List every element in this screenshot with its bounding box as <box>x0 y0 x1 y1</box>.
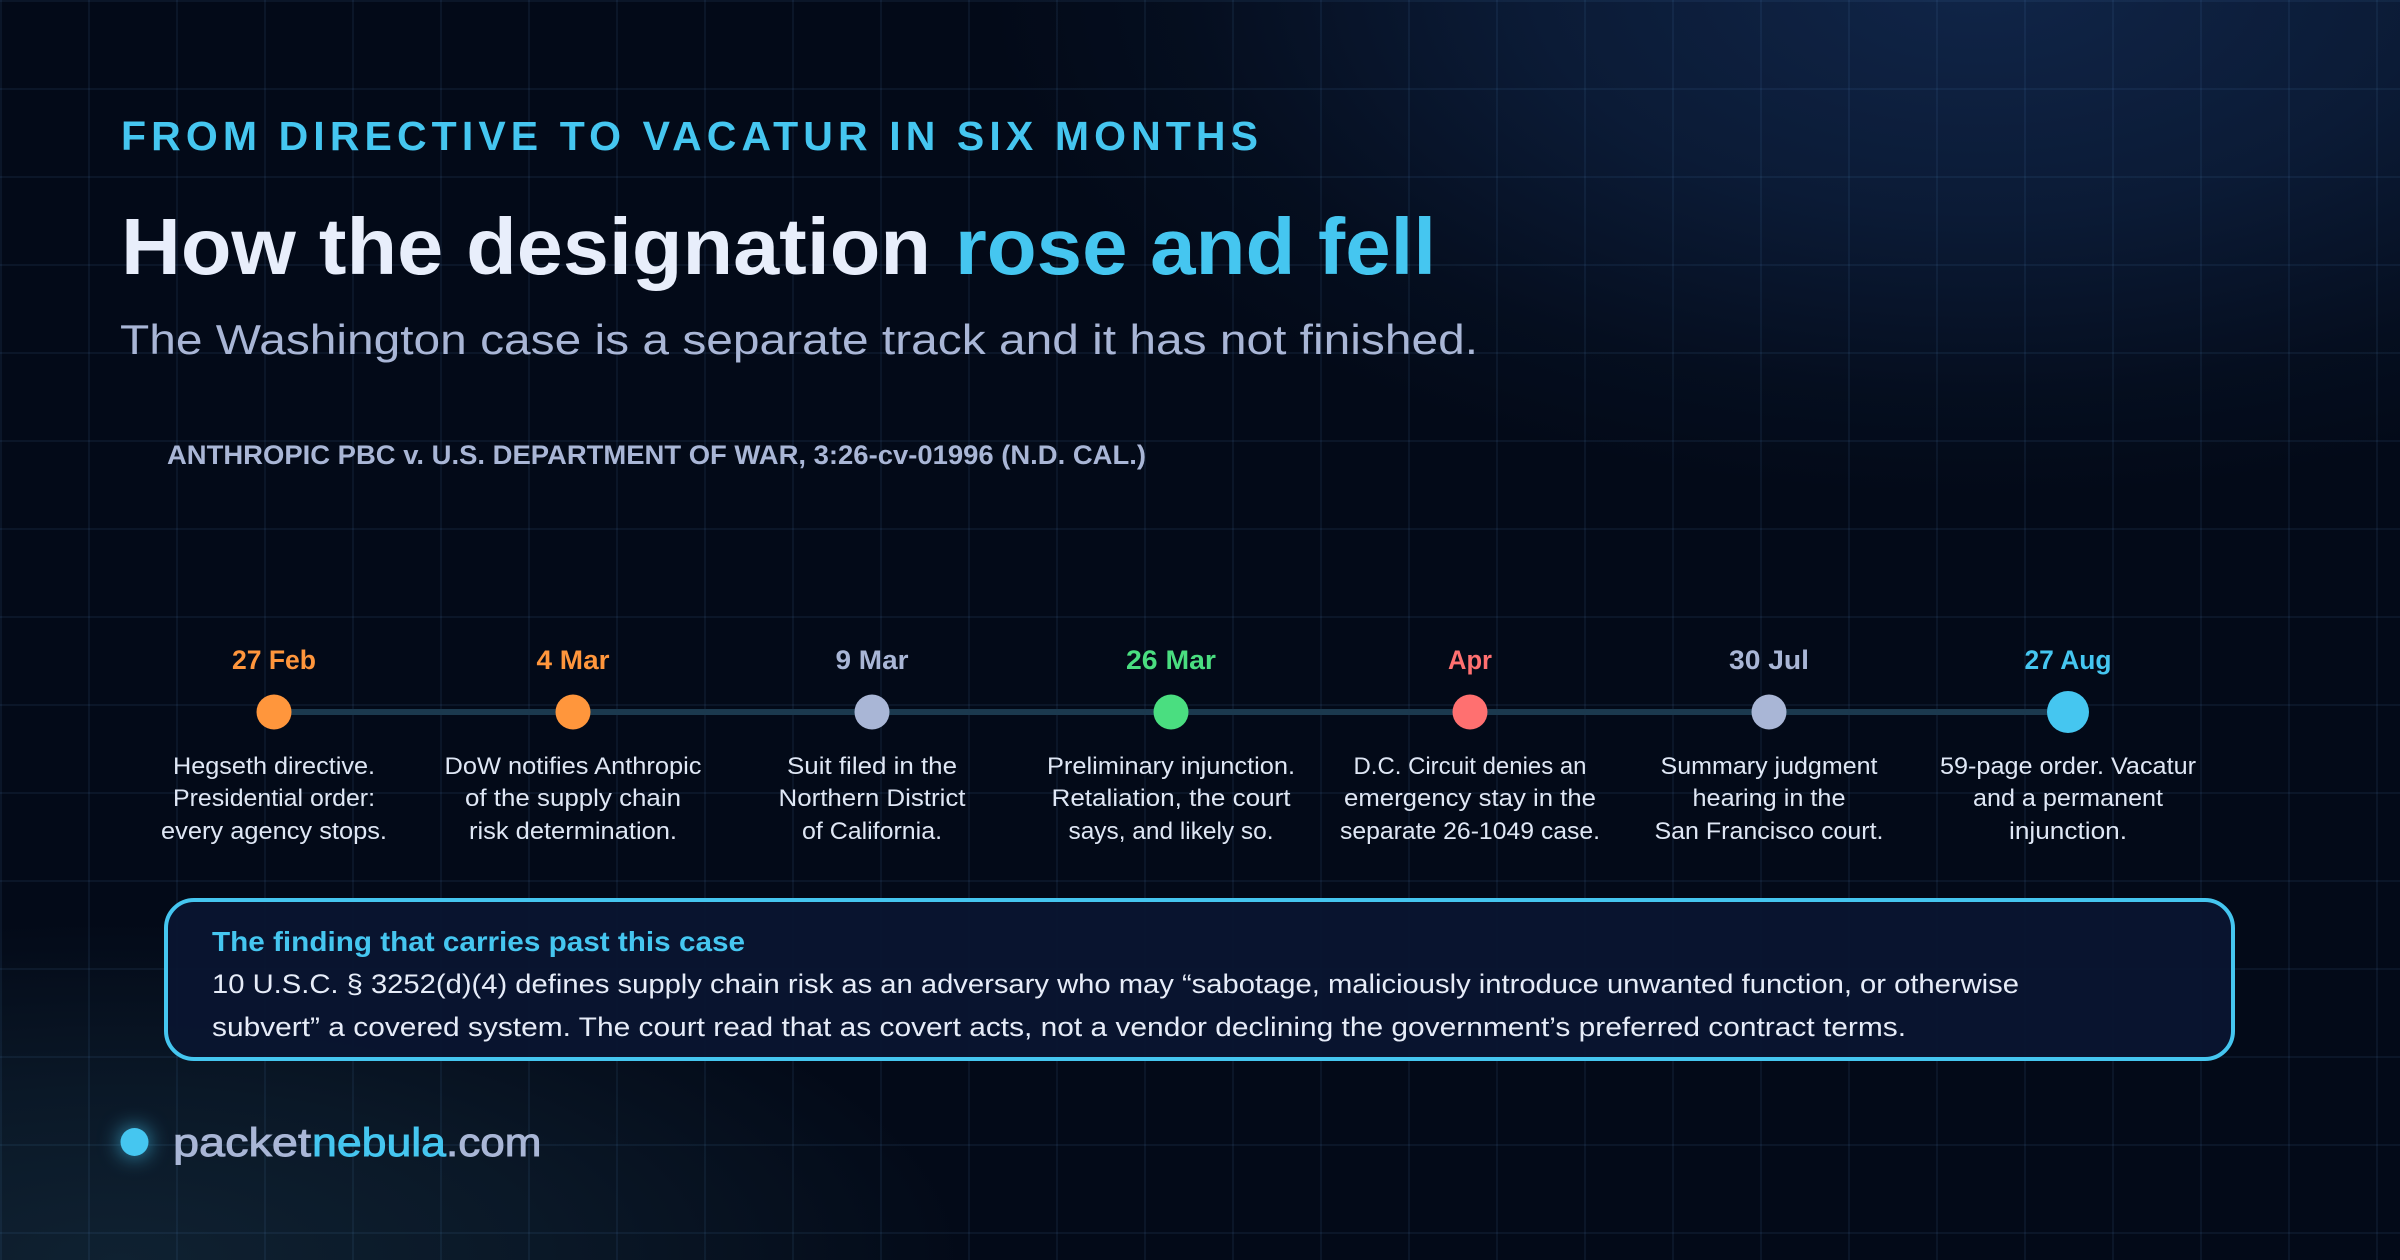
event: 4 Mar: DoW notifies Anthropic <box>444 753 702 780</box>
event: 26 Mar: says, and likely so. <box>1068 818 1274 845</box>
event: 4 Mar: risk determination. <box>469 818 677 845</box>
case label: ANTHROPIC PBC v. U.S. DEPARTMENT OF WAR, 3:26-cv-01996 (N.D. CAL.) <box>167 440 1146 470</box>
title: How the designation <box>121 202 931 291</box>
icon: glowing dot <box>120 1128 148 1156</box>
brand text: packet <box>173 1121 311 1165</box>
callout body: 10 U.S.C. § 3252(d)(4) defines supply chain risk as an adversary who may “sabotage, maliciously introduce unwanted function, or otherwise <box>212 969 2019 999</box>
event: 27 Aug: injunction. <box>2009 818 2127 845</box>
eyebrow: FROM DIRECTIVE TO VACATUR IN SIX MONTHS <box>121 113 1258 159</box>
event: 30 Jul: hearing in the <box>1692 785 1846 812</box>
callout body <box>212 969 2019 1042</box>
event: 30 Jul: Summary judgment <box>1660 753 1878 780</box>
event: Apr: emergency stay in the <box>1344 785 1596 812</box>
event: 4 Mar: 4 Mar <box>536 645 610 675</box>
event: 4 Mar <box>444 645 702 845</box>
title: rose and fell <box>955 202 1436 291</box>
event: 27 Aug: and a permanent <box>1973 785 2163 812</box>
event: 4 Mar: of the supply chain <box>465 785 681 812</box>
event: 27 Feb: every agency stops. <box>161 818 387 845</box>
event: 9 Mar: Northern District <box>778 785 966 812</box>
event: 27 Aug: 27 Aug <box>2024 645 2112 675</box>
callout body: subvert” a covered system. The court read that as covert acts, not a vendor declining the government’s preferred contract terms. <box>212 1012 1906 1042</box>
timeline <box>161 645 2196 845</box>
brand text <box>173 1121 542 1165</box>
event: Apr: D.C. Circuit denies an <box>1354 753 1586 780</box>
event: 26 Mar: 26 Mar <box>1126 645 1217 675</box>
event: 27 Aug <box>1940 645 2196 845</box>
event: 30 Jul <box>1654 645 1884 845</box>
event: 9 Mar <box>778 645 966 845</box>
event: 26 Mar <box>1047 645 1295 845</box>
event: 9 Mar: of California. <box>802 818 942 845</box>
event: 9 Mar: Suit filed in the <box>787 753 957 780</box>
brand text: nebula <box>312 1121 447 1165</box>
event: Apr: separate 26-1049 case. <box>1340 818 1600 845</box>
timeline axis <box>274 709 2068 715</box>
footer brand <box>120 1121 542 1165</box>
callout <box>166 900 2233 1059</box>
event: 27 Feb: 27 Feb <box>232 645 316 675</box>
event: 27 Feb: Presidential order: <box>173 785 375 812</box>
event: 27 Feb <box>161 645 387 845</box>
event: 27 Feb: Hegseth directive. <box>173 753 375 780</box>
title <box>121 202 1436 291</box>
event: Apr <box>1340 645 1600 845</box>
event: 9 Mar: 9 Mar <box>836 645 909 675</box>
event: 26 Mar: Preliminary injunction. <box>1047 753 1295 780</box>
event: 26 Mar: Retaliation, the court <box>1052 785 1291 812</box>
event: Apr: Apr <box>1448 645 1492 675</box>
callout heading: The finding that carries past this case <box>212 926 745 957</box>
event: 27 Aug: 59-page order. Vacatur <box>1940 753 2196 780</box>
event: 30 Jul: San Francisco court. <box>1654 818 1884 845</box>
subtitle: The Washington case is a separate track and it has not finished. <box>120 316 1478 363</box>
event: 30 Jul: 30 Jul <box>1729 645 1809 675</box>
brand text: .com <box>446 1121 542 1165</box>
